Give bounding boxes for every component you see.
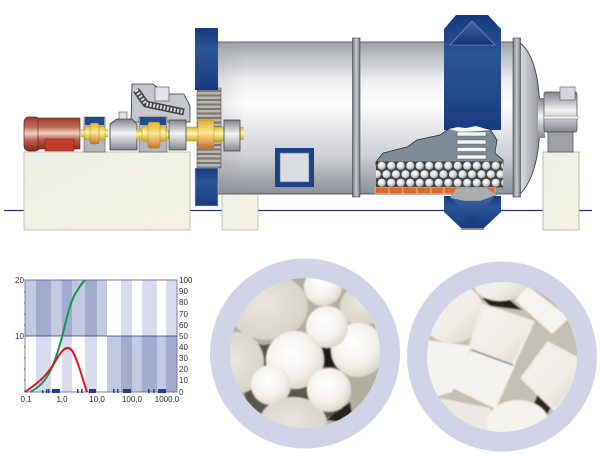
couplings [81, 129, 108, 137]
right axis labels: 10 [179, 376, 188, 385]
right axis labels: 30 [179, 354, 188, 363]
grinding balls [376, 162, 503, 188]
axis ticks: log scale [42, 389, 166, 393]
x axis labels: 0,1 [20, 395, 32, 404]
drum dome end [520, 43, 540, 194]
chart frame [24, 280, 177, 392]
drum flange: right [513, 38, 520, 197]
right axis labels [179, 276, 193, 397]
right axis labels: 20 [179, 365, 188, 374]
chart bands: upper [25, 280, 177, 336]
pedestal: gear [222, 152, 258, 230]
outlet bearing [538, 87, 578, 152]
right axis labels: 70 [179, 310, 188, 319]
photo: grinding balls [230, 278, 380, 428]
right axis labels: 80 [179, 298, 188, 307]
right axis labels: 90 [179, 287, 188, 296]
gear bearing [224, 120, 240, 151]
right axis labels: 60 [179, 321, 188, 330]
particle size chart [15, 276, 193, 404]
x axis labels: 1,0 [56, 395, 68, 404]
left axis labels: 20 [15, 276, 24, 285]
feed hopper [131, 84, 190, 122]
gearbox housing: second [139, 117, 167, 152]
right axis labels: 40 [179, 343, 188, 352]
blue gear cover: bottom [195, 168, 218, 206]
x axis labels: 100,0 [122, 395, 143, 404]
pedestal: drive [24, 152, 190, 230]
x axis labels: 10,0 [89, 395, 105, 404]
lifter bars [457, 132, 486, 159]
lining bricks [375, 188, 495, 194]
drum flange: middle [352, 38, 360, 197]
right axis labels: 0 [179, 388, 184, 397]
mill drum [215, 38, 540, 197]
blue discharge housing [444, 15, 501, 230]
photo: grinding cylinders [427, 282, 577, 432]
drive motor [24, 117, 80, 151]
girth gear [195, 28, 221, 206]
drive train [81, 112, 244, 152]
left axis labels [15, 276, 24, 341]
ground line [4, 210, 592, 212]
ball mill diagram [4, 15, 592, 230]
x axis labels [20, 395, 180, 404]
x axis labels: 1000,0 [155, 395, 180, 404]
ground material [450, 187, 497, 201]
chart bands: lower [36, 336, 177, 392]
inspection hatch [275, 148, 314, 187]
pedestal: outlet [543, 152, 579, 230]
reducer [110, 119, 137, 150]
right axis labels: 50 [179, 332, 188, 341]
left axis labels: 10 [15, 332, 24, 341]
blue gear cover: top [195, 28, 218, 90]
circle: cylindrical media [407, 262, 597, 452]
green cumulative curve [30, 280, 85, 392]
red distribution curve [25, 348, 87, 392]
right axis labels: 100 [179, 276, 193, 285]
pinion bearing [169, 120, 186, 150]
gearbox housing: first [84, 117, 105, 152]
mill cutaway [375, 126, 503, 201]
circle: spherical media [210, 258, 400, 451]
